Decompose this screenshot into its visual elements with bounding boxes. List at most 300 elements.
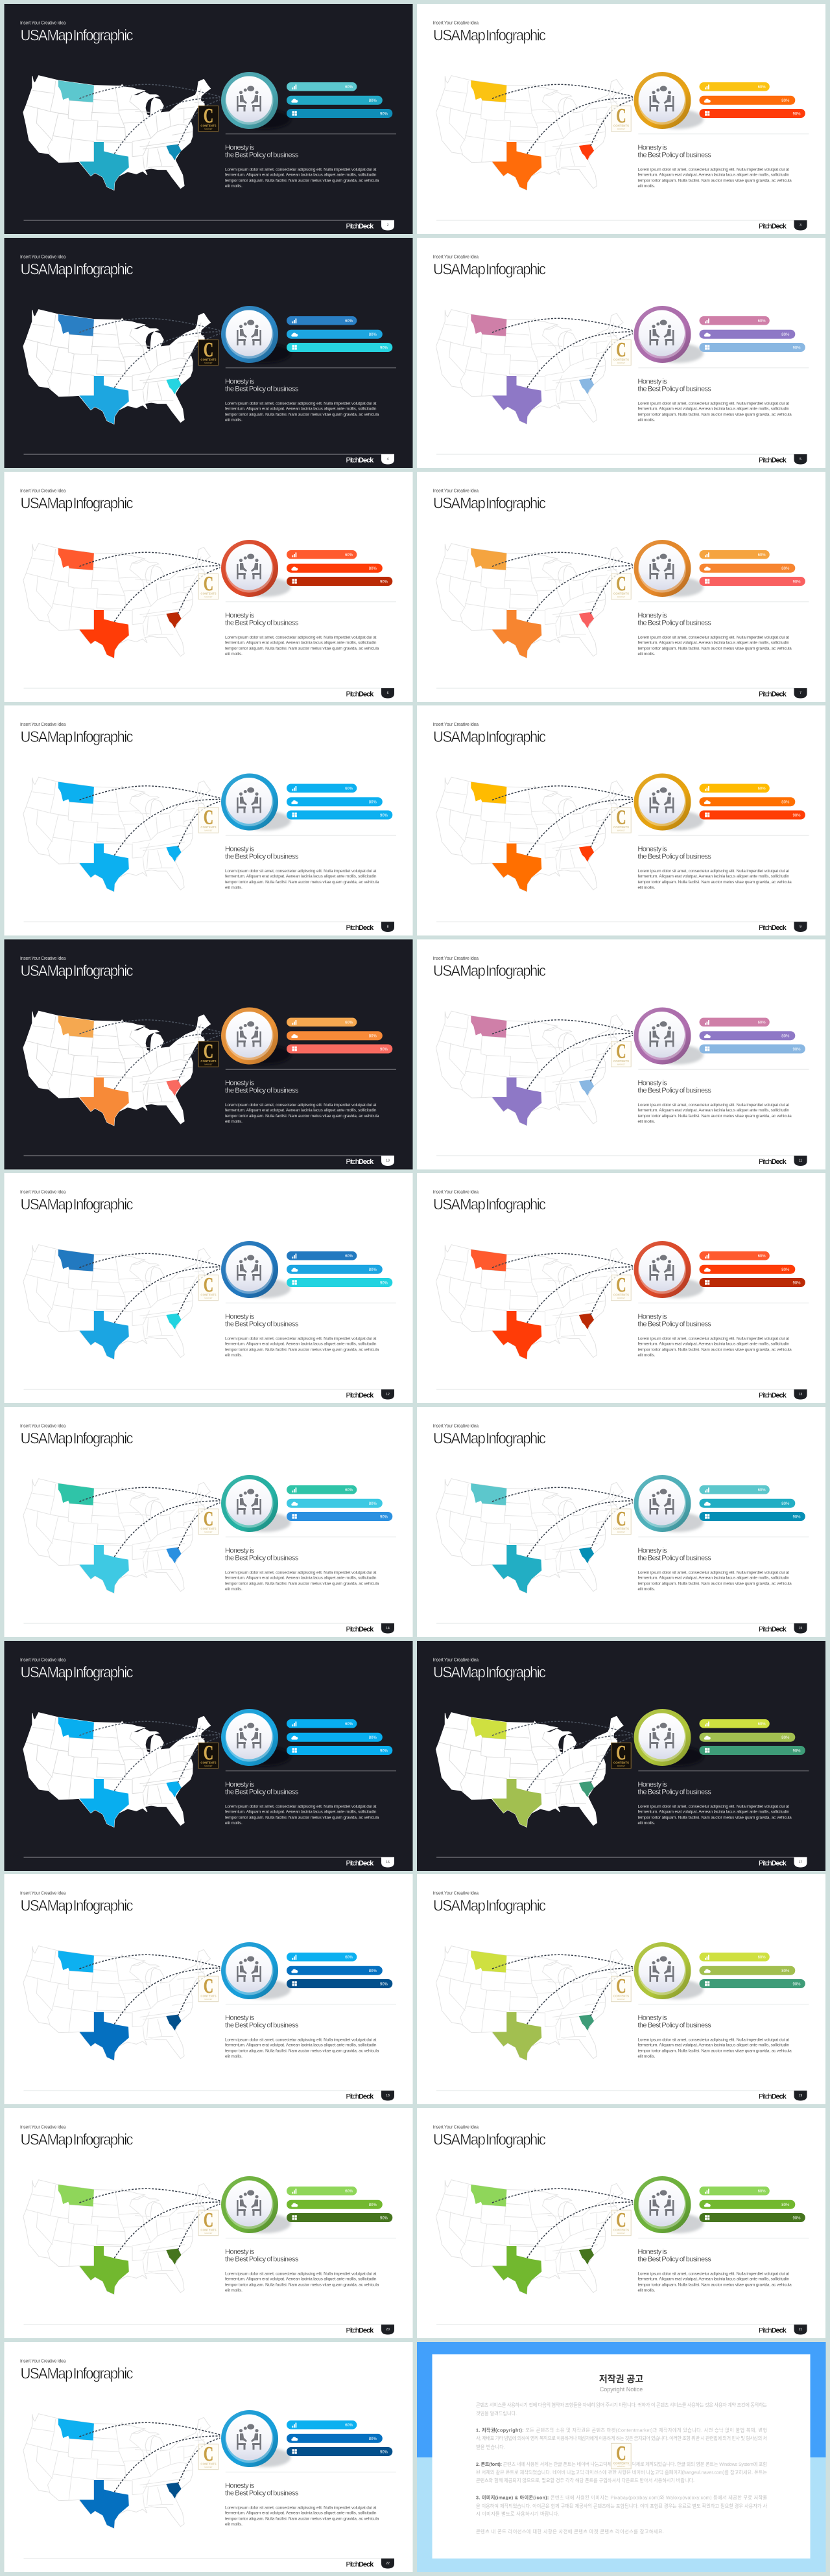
percentage bars	[287, 1953, 392, 1988]
badge: MARKET	[204, 128, 213, 130]
body text	[638, 1336, 792, 1358]
percentage bars	[287, 550, 392, 586]
map of USA	[436, 1946, 623, 2060]
heading: the Best Policy of business	[638, 2022, 711, 2030]
notice paragraphs: 1. 저작권(copyright): 모든 콘텐츠의 소유 및 저작권은 콘텐츠 마켓(Contentmarket)과 제작자에게 있습니다. 사전 승낙 없이 불법 복제, 변형	[476, 2428, 767, 2433]
title: USA Map Infographic	[21, 1896, 133, 1914]
badge: CONTENTS	[613, 2461, 629, 2465]
page number	[381, 2325, 394, 2334]
body text: Lorem ipsum dolor sit amet, consectetur adipiscing elit. Nulla imperdiet volutpat dui at	[225, 1103, 377, 1108]
page number	[381, 1389, 394, 1400]
dotted connectors	[79, 552, 220, 621]
page number	[794, 1389, 807, 1400]
badge: C	[204, 1039, 213, 1063]
map of USA	[23, 544, 210, 658]
percentage bars: 90%	[792, 1749, 801, 1753]
body text	[638, 869, 792, 890]
slide background	[417, 1407, 825, 1637]
dotted connectors	[492, 1253, 633, 1323]
percentage bars: 60%	[345, 86, 353, 89]
brand: PitchDeck	[346, 2093, 374, 2101]
badge: CONTENTS	[200, 2228, 217, 2232]
heading: Honesty is	[225, 612, 255, 620]
heading	[225, 2014, 299, 2030]
heading: Honesty is	[638, 1547, 667, 1555]
slide 16: dark cyan	[4, 1641, 412, 1871]
page number: 13	[799, 1393, 802, 1397]
page number: 10	[386, 1159, 390, 1163]
badge	[611, 1039, 631, 1067]
page number	[794, 688, 807, 699]
percentage bars	[699, 1719, 805, 1755]
page number: 15	[799, 1627, 802, 1630]
brand: PitchDeck	[346, 924, 374, 932]
body text: fermentum. Aliquam erat volutpat. Aenean lacinia lacus aliquet ante mollis, sollicitudin	[638, 1108, 789, 1113]
map of USA	[23, 2180, 210, 2294]
percentage bars: 80%	[369, 1034, 377, 1038]
slide background	[417, 472, 825, 702]
brand: PitchDeck	[346, 1158, 374, 1166]
badge: C	[204, 338, 213, 361]
notice paragraphs: 2. 폰트(font): 콘텐츠 내에 사용된 서체는 한글 폰트는 네이버 나눔고딕체 및 맑은 고딕체로 제작되었습니다. 한글 외의 영문 폰트는 Windows System에 포함	[476, 2461, 767, 2467]
badge: C	[616, 2209, 626, 2231]
brand: PitchDeck	[346, 1626, 374, 1634]
page number	[794, 1623, 807, 1633]
body text: elit mollis.	[225, 1120, 243, 1124]
brand: PitchDeck	[759, 1392, 787, 1400]
percentage bars	[699, 1017, 805, 1054]
page number: 19	[799, 2094, 802, 2098]
body text: elit mollis.	[225, 1821, 243, 1826]
slide 9: light yellow	[417, 705, 825, 936]
badge: MARKET	[617, 128, 625, 130]
title: USA Map Infographic	[21, 26, 133, 44]
heading: the Best Policy of business	[638, 2255, 711, 2263]
body text: tempor tortor aliquam. Nulla facilisi. Nam auctor metus vitae quam gravida, ac vehicula	[225, 2048, 379, 2053]
badge	[611, 806, 631, 833]
percentage bars: 90%	[792, 1281, 801, 1285]
page number	[794, 2091, 807, 2101]
body text: fermentum. Aliquam erat volutpat. Aenean lacinia lacus aliquet ante mollis, sollicitudin	[638, 1810, 789, 1815]
page number	[381, 2559, 394, 2569]
badge	[198, 2209, 219, 2236]
body text: tempor tortor aliquam. Nulla facilisi. Nam auctor metus vitae quam gravida, ac vehicula	[225, 1815, 379, 1820]
percentage bars	[699, 2187, 805, 2222]
badge	[611, 1975, 631, 2002]
page number: 17	[799, 1861, 802, 1864]
heading	[225, 1547, 299, 1562]
badge: C	[616, 104, 626, 127]
badge	[198, 1741, 219, 1769]
body text: fermentum. Aliquam erat volutpat. Aenean lacinia lacus aliquet ante mollis, sollicitudin	[225, 641, 377, 645]
badge	[198, 806, 219, 833]
page number: 8	[387, 925, 389, 929]
heading	[225, 845, 299, 861]
notice paragraphs: 사, 재배포 기타 방법에 의하여 영리 목적으로 이용하거나 제삼자에게 이용하게 하는 것은 금지되어 있습니다. 이러한 조항 위반 시 관련법에 의거 민사 및 형사상의 처	[476, 2435, 767, 2441]
brand: PitchDeck	[759, 223, 787, 231]
heading: the Best Policy of business	[225, 152, 299, 159]
body text: elit mollis.	[638, 1821, 656, 1826]
badge: C	[204, 1507, 213, 1530]
panel: copyright notice	[417, 2342, 826, 2572]
icon dial	[634, 1709, 704, 1766]
icon dial	[221, 72, 290, 129]
body text: tempor tortor aliquam. Nulla facilisi. Nam auctor metus vitae quam gravida, ac vehicula	[638, 1114, 792, 1119]
percentage bars: 80%	[781, 1736, 790, 1740]
notice paragraphs: 콘텐츠 서비스를 사용하시기 전에 다음의 협약과 조항들을 자세히 읽어 주시기 바랍니다. 귀하가 이 콘텐츠 서비스를 사용하는 것은 사용자 계약 조건에 동의하는	[476, 2402, 767, 2408]
map of USA	[23, 1946, 210, 2060]
body text: tempor tortor aliquam. Nulla facilisi. Nam auctor metus vitae quam gravida, ac vehicula	[638, 2048, 792, 2053]
slide background	[4, 705, 412, 936]
body text: tempor tortor aliquam. Nulla facilisi. Nam auctor metus vitae quam gravida, ac vehicula	[225, 178, 379, 183]
dotted connectors	[492, 1955, 633, 2024]
dotted connectors	[79, 318, 220, 388]
body text	[638, 1570, 792, 1592]
heading: Honesty is	[638, 1781, 667, 1789]
map of USA	[23, 310, 210, 424]
map of USA	[436, 777, 623, 892]
body text: Lorem ipsum dolor sit amet, consectetur adipiscing elit. Nulla imperdiet volutpat dui at	[638, 1103, 789, 1108]
percentage bars: 90%	[792, 1048, 801, 1052]
icon dial	[221, 540, 290, 597]
heading: the Best Policy of business	[638, 385, 711, 393]
percentage bars	[287, 1017, 392, 1054]
slide 13: light red	[417, 1173, 825, 1403]
map of USA	[436, 1713, 623, 1827]
heading: Honesty is	[638, 1313, 667, 1321]
body text: fermentum. Aliquam erat volutpat. Aenean lacinia lacus aliquet ante mollis, sollicitudin	[225, 2043, 377, 2048]
heading: Honesty is	[225, 378, 255, 386]
heading: the Best Policy of business	[225, 385, 299, 393]
subtitle: Insert Your Creative Idea	[433, 1190, 479, 1195]
body text: Lorem ipsum dolor sit amet, consectetur adipiscing elit. Nulla imperdiet volutpat dui at	[225, 401, 377, 406]
body text: elit mollis.	[225, 652, 243, 656]
body text: Lorem ipsum dolor sit amet, consectetur adipiscing elit. Nulla imperdiet volutpat dui at	[638, 2271, 789, 2276]
heading: the Best Policy of business	[638, 1789, 711, 1796]
title: USA Map Infographic	[433, 1195, 546, 1213]
icon dial	[221, 1942, 290, 1999]
slide 22: light navy	[4, 2342, 412, 2572]
page number	[794, 220, 807, 231]
slide 11: light purple	[417, 940, 825, 1169]
dotted connectors	[492, 1721, 633, 1791]
body text: Lorem ipsum dolor sit amet, consectetur adipiscing elit. Nulla imperdiet volutpat dui at	[638, 167, 789, 172]
body text	[225, 2505, 379, 2527]
percentage bars: 90%	[792, 814, 801, 818]
slide 5: light purple	[417, 238, 825, 468]
percentage bars: 90%	[380, 1048, 388, 1052]
percentage bars: 60%	[758, 1723, 766, 1726]
body text: Lorem ipsum dolor sit amet, consectetur adipiscing elit. Nulla imperdiet volutpat dui at	[225, 2271, 377, 2276]
map of USA	[436, 310, 623, 424]
page number	[381, 220, 394, 231]
page number	[794, 1156, 807, 1166]
brand: PitchDeck	[759, 691, 787, 699]
title: USA Map Infographic	[433, 260, 546, 278]
percentage bars: 90%	[792, 580, 801, 584]
badge: MARKET	[204, 830, 213, 832]
title: USA Map Infographic	[21, 260, 133, 278]
percentage bars: 90%	[380, 814, 388, 818]
body text: tempor tortor aliquam. Nulla facilisi. Nam auctor metus vitae quam gravida, ac vehicula	[638, 178, 792, 183]
body text: Lorem ipsum dolor sit amet, consectetur adipiscing elit. Nulla imperdiet volutpat dui at	[225, 869, 377, 874]
body text	[225, 167, 379, 189]
percentage bars	[287, 82, 392, 118]
page number: 18	[386, 2094, 390, 2098]
heading: the Best Policy of business	[225, 1789, 299, 1796]
badge: C	[204, 2209, 213, 2231]
dotted connectors	[492, 1020, 633, 1089]
body text: Lorem ipsum dolor sit amet, consectetur adipiscing elit. Nulla imperdiet volutpat dui at	[225, 2505, 377, 2510]
badge: C	[616, 338, 626, 361]
body text: Lorem ipsum dolor sit amet, consectetur adipiscing elit. Nulla imperdiet volutpat dui at	[638, 1804, 789, 1809]
subtitle: Insert Your Creative Idea	[433, 1658, 479, 1663]
subtitle: Insert Your Creative Idea	[20, 1892, 66, 1896]
dotted connectors	[79, 1955, 220, 2024]
percentage bars: 90%	[380, 1515, 388, 1519]
percentage bars: 60%	[345, 1255, 353, 1259]
slide background	[4, 4, 412, 234]
slide 17: dark lime	[417, 1641, 825, 1871]
badge: MARKET	[617, 1531, 625, 1533]
page number: 4	[387, 458, 389, 461]
dotted connectors	[79, 786, 220, 855]
icon dial	[221, 1007, 290, 1064]
percentage bars: 80%	[781, 1034, 790, 1038]
body text: tempor tortor aliquam. Nulla facilisi. Nam auctor metus vitae quam gravida, ac vehicula	[225, 412, 379, 417]
heading	[225, 1080, 299, 1095]
notice paragraphs: 콘텐츠와 함께 제공되지 않으므로, 필요할 경우 각각 해당 폰트를 구입하셔서 다운로드 받아서 사용하시기 바랍니다.	[476, 2477, 694, 2483]
heading	[638, 2014, 711, 2030]
heading: the Best Policy of business	[638, 1087, 711, 1095]
body text: Lorem ipsum dolor sit amet, consectetur adipiscing elit. Nulla imperdiet volutpat dui at	[225, 1336, 377, 1341]
heading: the Best Policy of business	[225, 1087, 299, 1095]
body text: Lorem ipsum dolor sit amet, consectetur adipiscing elit. Nulla imperdiet volutpat dui at	[225, 2037, 377, 2042]
subtitle: Insert Your Creative Idea	[20, 1658, 66, 1663]
page number	[794, 2325, 807, 2334]
slide background	[4, 472, 412, 702]
page number	[381, 1623, 394, 1633]
percentage bars	[287, 1485, 392, 1521]
title: USA Map Infographic	[21, 728, 133, 745]
badge	[198, 2443, 219, 2470]
body text: fermentum. Aliquam erat volutpat. Aenean lacinia lacus aliquet ante mollis, sollicitudin	[638, 641, 789, 645]
body text	[225, 1570, 379, 1592]
badge	[198, 1975, 219, 2002]
badge: MARKET	[617, 1998, 625, 2001]
percentage bars: 80%	[369, 1736, 377, 1740]
badge: MARKET	[617, 362, 625, 364]
page number	[794, 1857, 807, 1868]
percentage bars: 80%	[369, 2437, 377, 2441]
percentage bars: 60%	[345, 1956, 353, 1960]
percentage bars: 60%	[345, 787, 353, 791]
icon dial	[634, 1942, 704, 1999]
dotted connectors	[79, 1253, 220, 1323]
percentage bars: 80%	[781, 1268, 790, 1272]
body text: fermentum. Aliquam erat volutpat. Aenean lacinia lacus aliquet ante mollis, sollicitudin	[638, 2043, 789, 2048]
map of USA	[436, 2180, 623, 2294]
badge: CONTENTS	[200, 1995, 217, 1997]
body text	[638, 2037, 792, 2059]
icon dial	[634, 72, 704, 129]
slide 20: light green	[4, 2108, 412, 2338]
slide 8: light cyan	[4, 705, 412, 936]
heading: the Best Policy of business	[638, 152, 711, 159]
body text: elit mollis.	[638, 1353, 656, 1358]
brand: PitchDeck	[346, 691, 374, 699]
map of USA	[23, 2414, 210, 2528]
body text	[225, 1336, 379, 1358]
badge: MARKET	[204, 1765, 213, 1767]
badge: CONTENTS	[613, 124, 629, 127]
brand: PitchDeck	[759, 457, 787, 465]
percentage bars: 60%	[758, 1255, 766, 1259]
badge: CONTENTS	[200, 1294, 217, 1296]
percentage bars: 80%	[369, 99, 377, 103]
dotted connectors	[79, 1721, 220, 1791]
percentage bars: 90%	[380, 346, 388, 350]
brand: PitchDeck	[346, 223, 374, 231]
page number	[381, 454, 394, 464]
body text: fermentum. Aliquam erat volutpat. Aenean lacinia lacus aliquet ante mollis, sollicitudin	[638, 874, 789, 879]
badge: CONTENTS	[200, 358, 217, 362]
page number: 12	[386, 1393, 390, 1397]
brand: PitchDeck	[346, 1860, 374, 1868]
slide background	[4, 1407, 412, 1637]
heading: the Best Policy of business	[225, 1554, 299, 1562]
heading	[225, 1781, 299, 1796]
heading	[225, 612, 299, 627]
subtitle: Insert Your Creative Idea	[433, 2126, 479, 2130]
body text: tempor tortor aliquam. Nulla facilisi. Nam auctor metus vitae quam gravida, ac vehicula	[638, 412, 792, 417]
badge	[611, 1273, 631, 1301]
percentage bars	[287, 1719, 392, 1755]
brand: PitchDeck	[759, 1158, 787, 1166]
body text	[225, 2037, 379, 2059]
body text	[225, 401, 379, 423]
notice paragraphs: 콘텐츠 내 폰트 라이선스에 대한 사항은 사전에 콘텐츠 마켓 콘텐츠 라이선스를 참고하세요.	[476, 2529, 664, 2535]
icon dial	[634, 1007, 704, 1064]
body text: Lorem ipsum dolor sit amet, consectetur adipiscing elit. Nulla imperdiet volutpat dui at	[638, 401, 789, 406]
body text: elit mollis.	[638, 885, 656, 890]
percentage bars: 90%	[792, 1515, 801, 1519]
badge: C	[616, 1741, 626, 1764]
percentage bars	[699, 784, 805, 819]
dotted connectors	[492, 84, 633, 154]
percentage bars: 60%	[758, 2190, 766, 2194]
heading	[225, 144, 299, 159]
percentage bars: 90%	[380, 112, 388, 116]
percentage bars	[699, 1485, 805, 1521]
badge: MARKET	[204, 2232, 213, 2234]
heading	[225, 1313, 299, 1329]
heading: Honesty is	[225, 2248, 255, 2256]
subtitle: Insert Your Creative Idea	[20, 255, 66, 260]
heading: Honesty is	[638, 1080, 667, 1087]
subtitle: Insert Your Creative Idea	[433, 957, 479, 961]
badge: MARKET	[617, 596, 625, 598]
heading: the Best Policy of business	[225, 2022, 299, 2030]
slide 19: light lime	[417, 1874, 825, 2104]
body text: fermentum. Aliquam erat volutpat. Aenean lacinia lacus aliquet ante mollis, sollicitudin	[225, 2277, 377, 2282]
badge: MARKET	[617, 1765, 625, 1767]
body text: elit mollis.	[638, 184, 656, 189]
percentage bars: 90%	[380, 1749, 388, 1753]
heading: Honesty is	[225, 144, 255, 152]
page number	[794, 922, 807, 932]
badge: C	[616, 806, 626, 829]
badge: C	[204, 1741, 213, 1764]
page number	[381, 922, 394, 932]
badge: CONTENTS	[613, 1060, 629, 1063]
heading: Honesty is	[638, 378, 667, 386]
heading: the Best Policy of business	[638, 1321, 711, 1329]
page number: 11	[799, 1159, 802, 1163]
icon dial	[221, 2410, 290, 2467]
body text: fermentum. Aliquam erat volutpat. Aenean lacinia lacus aliquet ante mollis, sollicitudin	[225, 173, 377, 178]
percentage bars: 90%	[792, 112, 801, 116]
body text: elit mollis.	[225, 885, 243, 890]
brand: PitchDeck	[759, 924, 787, 932]
percentage bars: 80%	[781, 2203, 790, 2207]
badge	[611, 1507, 631, 1535]
percentage bars: 90%	[380, 1281, 388, 1285]
title: USA Map Infographic	[21, 962, 133, 979]
icon dial	[634, 1241, 704, 1298]
title: USA Map Infographic	[21, 1195, 133, 1213]
badge: CONTENTS	[200, 1527, 217, 1531]
badge: CONTENTS	[613, 1995, 629, 1997]
heading: the Best Policy of business	[638, 853, 711, 861]
dotted connectors	[79, 1020, 220, 1089]
percentage bars: 60%	[758, 319, 766, 323]
percentage bars: 80%	[369, 1502, 377, 1506]
title: USA Map Infographic	[433, 962, 546, 979]
badge	[611, 1741, 631, 1769]
slide 18: light navy	[4, 1874, 412, 2104]
page number: 3	[800, 224, 801, 227]
body text: fermentum. Aliquam erat volutpat. Aenean lacinia lacus aliquet ante mollis, sollicitudin	[225, 1810, 377, 1815]
percentage bars	[699, 82, 805, 118]
body text	[225, 869, 379, 890]
map of USA	[23, 1479, 210, 1593]
body text: fermentum. Aliquam erat volutpat. Aenean lacinia lacus aliquet ante mollis, sollicitudin	[225, 407, 377, 412]
body text: Lorem ipsum dolor sit amet, consectetur adipiscing elit. Nulla imperdiet volutpat dui at	[225, 1804, 377, 1809]
percentage bars	[699, 316, 805, 352]
body text: fermentum. Aliquam erat volutpat. Aenean lacinia lacus aliquet ante mollis, sollicitudin	[225, 1342, 377, 1347]
slide 15: light teal	[417, 1407, 825, 1637]
heading: the Best Policy of business	[225, 2255, 299, 2263]
page number: 2	[387, 224, 389, 227]
percentage bars: 80%	[369, 801, 377, 805]
badge: C	[204, 572, 213, 595]
slide background	[417, 2108, 825, 2338]
percentage bars: 60%	[345, 319, 353, 323]
title: USA Map Infographic	[433, 1663, 546, 1681]
title: USA Map Infographic	[21, 2130, 133, 2148]
body text	[638, 1103, 792, 1124]
notice title: 저작권 공고	[599, 2374, 643, 2384]
badge	[198, 1039, 219, 1067]
badge: C	[616, 572, 626, 595]
subtitle: Insert Your Creative Idea	[20, 1424, 66, 1429]
body text	[225, 635, 379, 656]
percentage bars: 60%	[758, 1021, 766, 1025]
badge	[198, 1273, 219, 1301]
heading	[638, 378, 711, 393]
heading	[225, 2248, 299, 2263]
